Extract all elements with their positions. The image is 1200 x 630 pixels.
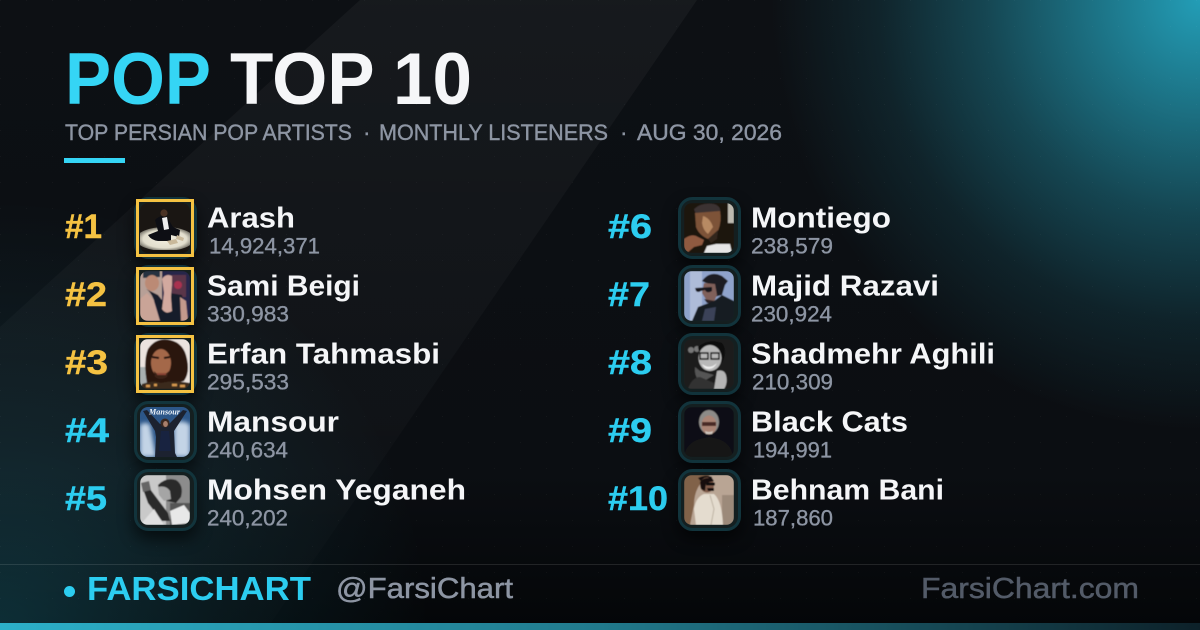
entry 1: Arash: #1 (65, 208, 102, 246)
entry 10: Behnam Bani: 187,860 (753, 506, 833, 530)
entry 10: Behnam Bani (608, 469, 942, 531)
icon: brand dot (64, 586, 75, 597)
icon: Mohsen Yeganeh photo (140, 475, 190, 525)
entry 6: Montiego: Montiego (751, 202, 891, 234)
subtitle (65, 120, 782, 145)
footer (64, 570, 1139, 607)
entry 3: Erfan Tahmasbi (65, 334, 440, 403)
entry 1: Arash: 14,924,371 (209, 234, 320, 258)
entry 3: Erfan Tahmasbi: 295,533 (207, 370, 289, 394)
entry 2: Sami Beigi (65, 266, 360, 335)
entry 1: Arash (65, 198, 320, 267)
icon: Black Cats photo (684, 407, 734, 457)
entry 10: Behnam Bani: #10 (608, 480, 668, 518)
entry 8: Shadmehr Aghili: Shadmehr Aghili (751, 338, 995, 370)
bottom gradient bar (0, 623, 1200, 630)
entry 4: Mansour (65, 402, 339, 471)
icon: Shadmehr Aghili photo (684, 339, 734, 389)
icon: Erfan Tahmasbi photo (140, 339, 190, 389)
social handle: @FarsiChart (336, 573, 513, 605)
entry 3: Erfan Tahmasbi: Erfan Tahmasbi (207, 338, 440, 370)
icon: Mansour photo: Mansour (148, 408, 181, 416)
entry 7: Majid Razavi: Majid Razavi (751, 270, 939, 302)
entry 4: Mansour: 240,634 (207, 438, 288, 462)
accent bar (64, 158, 125, 163)
entry 6: Montiego: 238,579 (751, 234, 833, 258)
icon: Sami Beigi photo (140, 271, 190, 321)
entry 1: Arash: Arash (207, 202, 295, 234)
subtitle: TOP PERSIAN POP ARTISTS (65, 120, 352, 145)
subtitle: AUG 30, 2026 (637, 120, 782, 145)
entry 6: Montiego (608, 198, 891, 267)
entry 9: Black Cats (608, 402, 908, 471)
website: FarsiChart.com (921, 573, 1139, 605)
icon: Montiego photo (684, 203, 734, 253)
entry 2: Sami Beigi: Sami Beigi (207, 270, 360, 302)
entry 6: Montiego: #6 (608, 208, 652, 246)
subtitle: · (363, 120, 370, 145)
entry 4: Mansour: #4 (65, 412, 109, 450)
entry 8: Shadmehr Aghili (608, 334, 995, 403)
entry 8: Shadmehr Aghili: #8 (608, 344, 652, 382)
entry 9: Black Cats: #9 (608, 412, 652, 450)
subtitle: MONTHLY LISTENERS (379, 120, 608, 145)
subtitle: · (620, 120, 628, 145)
entry 5: Mohsen Yeganeh: 240,202 (207, 506, 288, 530)
entry 9: Black Cats: Black Cats (751, 406, 908, 438)
entry 5: Mohsen Yeganeh (65, 470, 466, 539)
title: POP (65, 39, 211, 120)
icon: Arash photo (140, 203, 190, 253)
entry 3: Erfan Tahmasbi: #3 (65, 344, 108, 382)
brand name: FARSICHART (87, 570, 311, 607)
entry 2: Sami Beigi: #2 (65, 276, 107, 314)
icon: Behnam Bani photo (684, 475, 734, 525)
title: TOP 10 (230, 39, 472, 120)
entry 10: Behnam Bani: Behnam Bani (751, 474, 944, 506)
entry 4: Mansour: Mansour (207, 406, 339, 438)
entry 7: Majid Razavi: 230,924 (751, 302, 832, 326)
entry 9: Black Cats: 194,991 (753, 438, 832, 462)
entry 8: Shadmehr Aghili: 210,309 (752, 370, 833, 394)
entry 2: Sami Beigi: 330,983 (207, 302, 289, 326)
icon: Majid Razavi photo (684, 271, 734, 321)
entry 7: Majid Razavi (608, 266, 939, 335)
entry 5: Mohsen Yeganeh: Mohsen Yeganeh (207, 474, 466, 506)
entry 5: Mohsen Yeganeh: #5 (65, 480, 107, 518)
entry 7: Majid Razavi: #7 (608, 276, 650, 314)
icon: Mansour photo (140, 407, 190, 457)
